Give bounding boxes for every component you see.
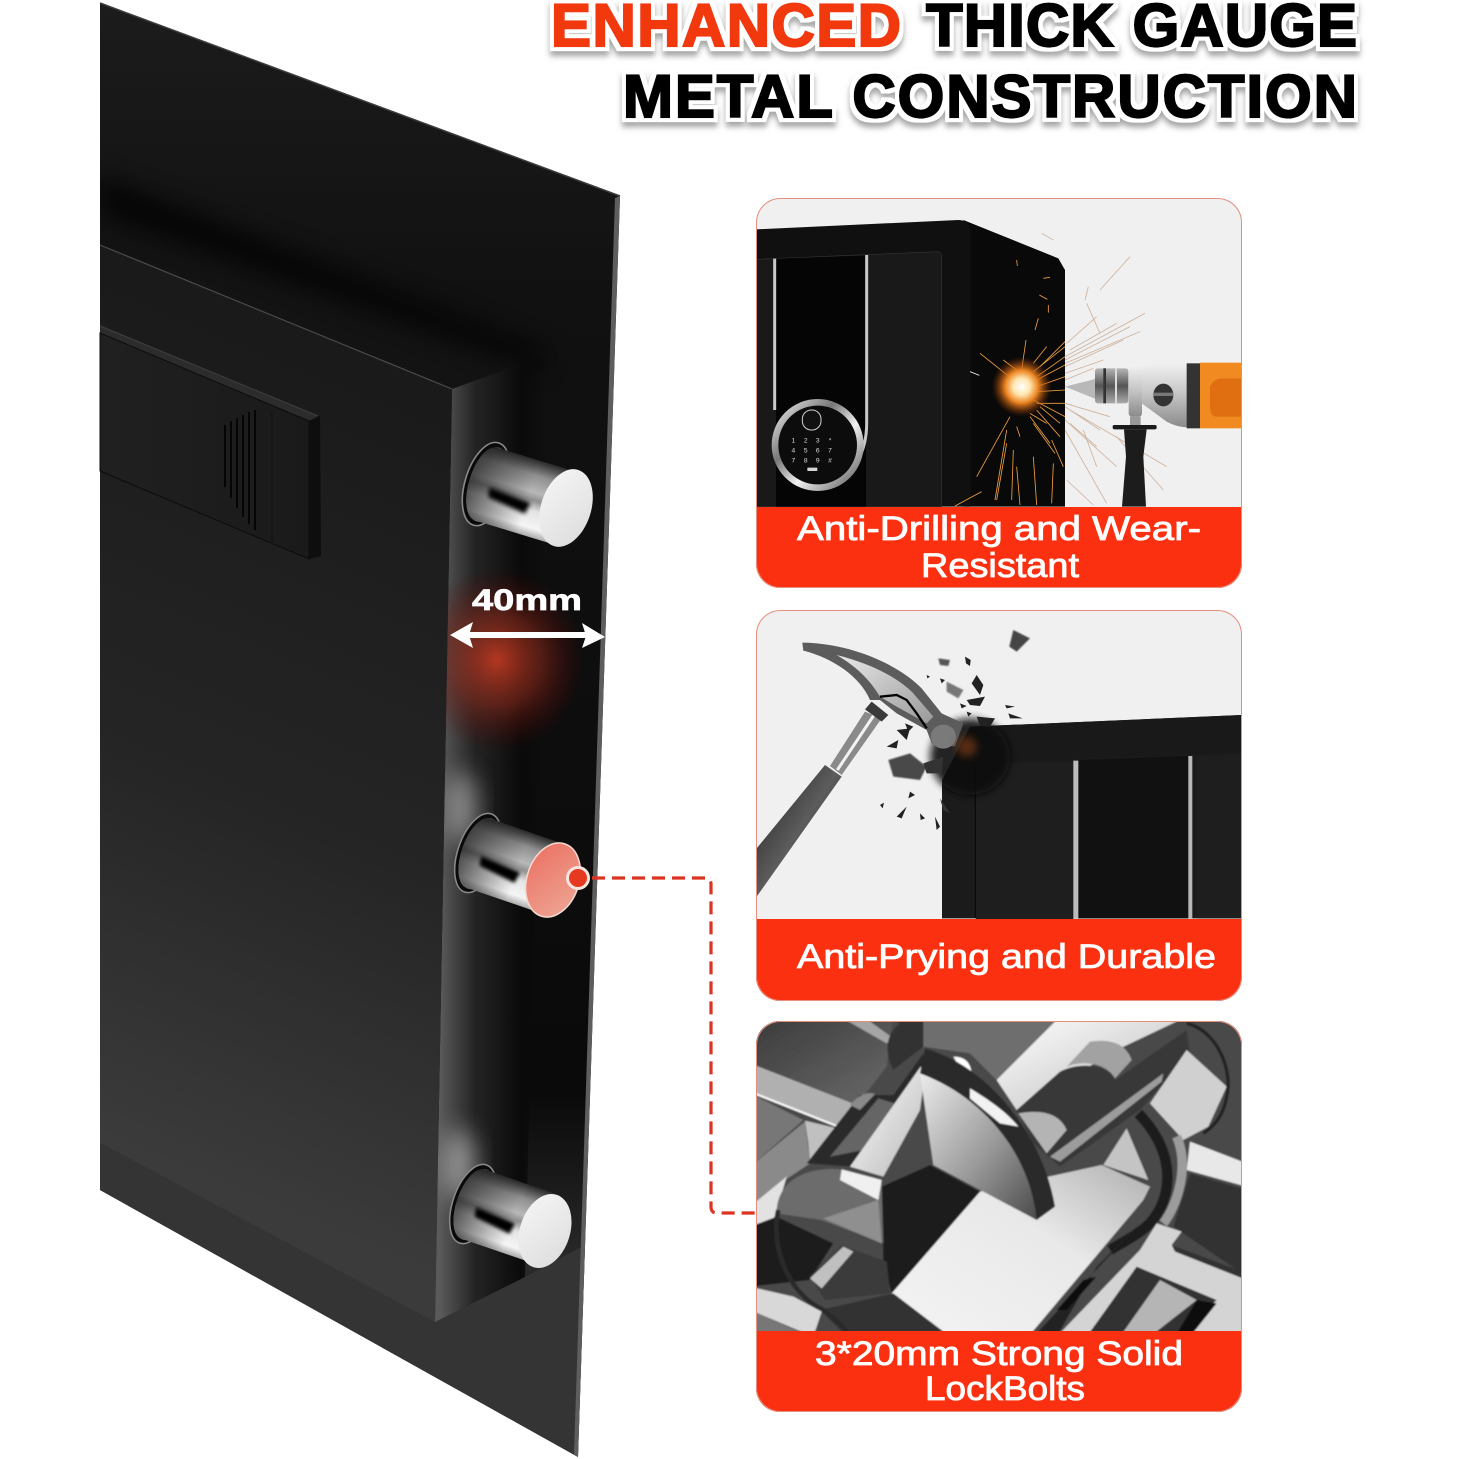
red caption band: [756, 507, 1242, 588]
illustration: chrome lock bolts close-up: [750, 1017, 1247, 1337]
lower right rails: [1033, 1223, 1247, 1337]
door handle bar: [100, 325, 321, 559]
red caption band: [756, 1331, 1242, 1412]
title: METAL CONSTRUCTION: [623, 63, 1357, 130]
left diagonal tube: [807, 1017, 925, 1177]
quarter disc bolt head: [920, 1048, 1055, 1220]
keypad dial: 8: [804, 458, 808, 465]
caption: anti-drilling: Anti-Drilling and Wear-: [797, 510, 1201, 548]
keypad dial: 9: [816, 458, 820, 465]
handle grip ridges: [225, 410, 255, 530]
power drill: [1065, 363, 1242, 507]
flying fragments: [880, 630, 1030, 830]
steel door plate: [100, 3, 620, 1457]
keypad dial: 7: [791, 458, 795, 465]
dashed connector from bolt to lock bolts panel: [568, 868, 756, 1213]
top center and upper bolt: [922, 1022, 1054, 1080]
keypad dial: #: [828, 458, 832, 465]
plate lower section: [100, 1143, 585, 1457]
caption: anti-prying: Anti-Prying and Durable: [797, 938, 1216, 976]
keypad dial: 1: [791, 438, 795, 445]
caption: lock bolts: [815, 1335, 1183, 1408]
caption: lock bolts: LockBolts: [925, 1370, 1085, 1408]
sparks on safe: [955, 260, 1065, 506]
debris streaks off safe: [1042, 233, 1167, 505]
black recess: [882, 1165, 980, 1293]
caption: anti-drilling: Resistant: [921, 547, 1080, 585]
illustration: hammer striking safe: [757, 630, 1242, 919]
left half disc bolt: [750, 1169, 950, 1337]
safe body top face: [100, 180, 548, 389]
keypad dial: [775, 402, 860, 488]
bottom locking bolt: [440, 1158, 581, 1275]
bright plate surface: [1103, 1128, 1148, 1180]
keypad dial: 3: [816, 438, 820, 445]
shadow on plate above body: [105, 185, 532, 360]
panel: lock bolts: [750, 1017, 1247, 1412]
caption: anti-drilling: [797, 510, 1201, 585]
door plate thin edge: [574, 196, 620, 1457]
top locking bolt: [453, 437, 602, 554]
connector dot: [568, 868, 588, 888]
40mm thickness dimension: [450, 584, 605, 648]
safe corner: [942, 715, 1242, 919]
safe body side face: [435, 354, 548, 1322]
keypad dial: 5: [804, 448, 808, 455]
safe body front face: [100, 245, 452, 1322]
panel: anti-prying: [756, 610, 1242, 1001]
side face red heat glow: [409, 568, 585, 1201]
keypad dial: 7: [828, 448, 832, 455]
caption: lock bolts: 3*20mm Strong Solid: [815, 1335, 1183, 1373]
right side rails: [1110, 1023, 1247, 1277]
keypad dial: 2: [804, 438, 808, 445]
panel: anti-drilling: [756, 198, 1242, 588]
double-headed arrow: [450, 622, 605, 648]
illustration: safe being drilled: [757, 220, 1242, 507]
middle locking bolt with red cap: [445, 807, 589, 924]
40mm label: 40mm: [472, 584, 582, 617]
hammer: [757, 643, 963, 897]
keypad dial: 4: [791, 448, 795, 455]
safe door: main product: [100, 3, 620, 1457]
keypad dial: 6: [816, 448, 820, 455]
red caption band: [756, 919, 1242, 1001]
keypad dial: *: [829, 438, 832, 445]
title: [551, 0, 1357, 130]
